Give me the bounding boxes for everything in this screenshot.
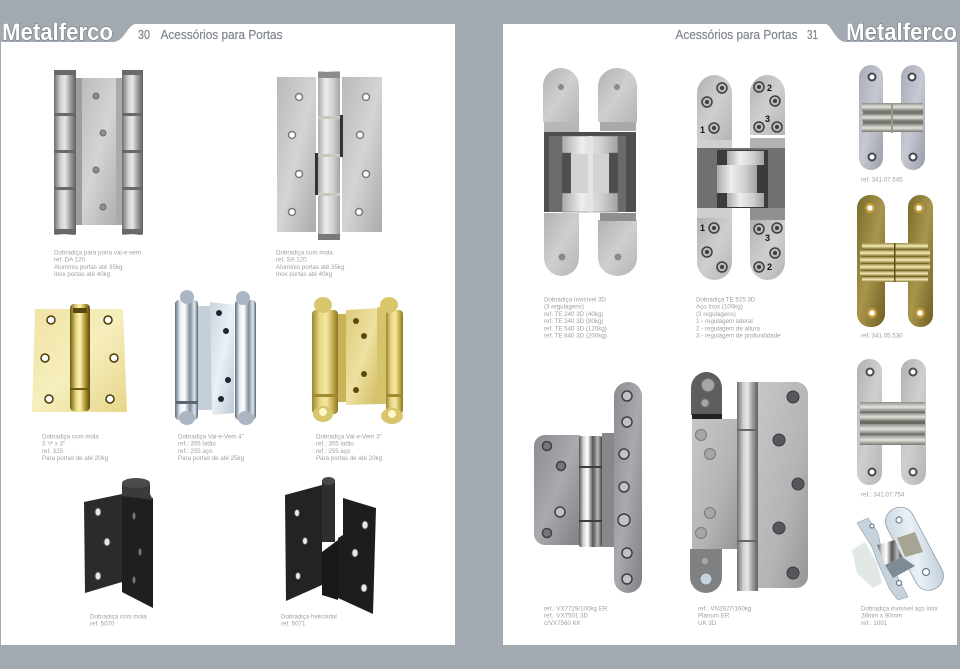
caption: SA 120: ref. SA 120 [276, 257, 307, 264]
icon: hinge VN2927 [690, 372, 808, 593]
caption: 341.07.754: ref.: 341.07.754 [861, 492, 905, 498]
caption: 1001: ref.: 1001 [861, 620, 888, 627]
caption: VN2927: Planum ER [698, 613, 730, 620]
caption: TE 525 3D: 1 - regulagem lateral [696, 318, 753, 325]
icon: brass concealed hinge 341.05.530 [857, 195, 933, 327]
caption: 355/255 3 inch: Dobradiça Vai-e-Vem 3" [316, 434, 382, 440]
icon: hinge DA 120 [54, 70, 143, 235]
caption: 5070: Dobradiça com mola [90, 614, 147, 620]
caption: 341.05.530: ref. 341.05.530 [861, 332, 903, 340]
icon: chrome double action hinge 4 inch [175, 290, 256, 425]
caption: VX7729: ref.: VX7729/100kg ER [544, 606, 608, 612]
caption: 355/255 4 inch: Para portas de até 25kg [178, 455, 245, 462]
labels: adjustment numbers: 3 [765, 114, 770, 124]
caption: 1001: Dobradiça invisível aço inox [861, 606, 939, 612]
caption: TE 240 3D: ref. TE 340 3D (80kg) [544, 318, 603, 325]
labels: adjustment numbers: 1 [700, 125, 705, 135]
icon: brass double action hinge 3 inch [312, 297, 403, 424]
icon: hinge SA 120 [277, 71, 382, 240]
icon: black spring hinge 5070 [84, 478, 153, 608]
caption: DA 120: ref. DA 120 [54, 257, 86, 264]
caption: DA 120: Dobradiça para porta vai-e-vem [54, 250, 141, 256]
panel: right page [503, 19, 960, 645]
caption: TE 525 3D: Dobradiça TE 525 3D [696, 296, 756, 304]
labels: adjustment numbers: 1 [700, 223, 705, 233]
caption: VX7729: ref.: VX7501 3D [544, 613, 589, 620]
icon: black helical hinge 5071 [285, 477, 376, 614]
heading: page 31: Acessórios para Portas [676, 28, 798, 42]
labels: adjustment numbers: 2 [767, 83, 772, 93]
caption: TE 525 3D: Aço Inox (100kg) [696, 304, 743, 311]
caption: DA 120: Alumínio portas até 35kg [54, 264, 123, 271]
icon: hinge VX7729 [534, 382, 642, 593]
caption: SA 120: Dobradiça com mola [276, 250, 333, 256]
caption: TE 525 3D: 2 - regulagem de altura [696, 325, 761, 332]
caption: VX7729: c/VX7560 KK [544, 620, 582, 627]
caption: TE 240 3D: ref. TE 540 3D (120kg) [544, 325, 607, 332]
caption: 5071: Dobradiça helicoidal [281, 614, 337, 620]
labels: adjustment numbers: 3 [765, 233, 770, 243]
caption: 355/255 3 inch: Para portas de até 20kg [316, 455, 383, 462]
caption: TE 240 3D: ref. TE 240 3D (40kg) [544, 311, 603, 318]
header: right logo tab [822, 19, 960, 645]
caption: TE 525 3D: (3 regulagens) [696, 311, 736, 318]
labels: adjustment numbers [700, 83, 772, 272]
caption: 341.07.545: ref. 341.07.545 [861, 176, 903, 184]
icon: concealed hinge 341.07.545 [859, 65, 925, 170]
caption: 5070: ref. 5070 [90, 621, 115, 628]
icon: concealed hinge 341.07.754 [857, 359, 926, 485]
caption: TE 525 3D: 3 - regulagem de profundidade [696, 332, 781, 340]
panel: left page [0, 19, 455, 645]
caption: 355/255 4 inch: Dobradiça Vai-e-Vem 4" [178, 434, 244, 440]
heading: page 31: 31 [807, 28, 818, 42]
icon: invisible stainless hinge 1001 [852, 502, 948, 600]
caption: 355/255 3 inch: ref.: 255 aço [316, 448, 351, 455]
caption: TE 240 3D: ref. TE 640 3D (200kg) [544, 332, 607, 340]
caption: 325: ref. 325 [42, 448, 64, 455]
caption: VN2927: UK 3D [698, 620, 717, 627]
caption: TE 240 3D: Dobradiça Invisível 3D [544, 296, 606, 304]
caption: 325: Dobradiça com mola [42, 434, 99, 440]
caption: 355/255 3 inch: ref.: 355 latão [316, 441, 354, 448]
caption: 355/255 4 inch: ref.: 355 latão [178, 441, 216, 448]
labels: adjustment numbers: 2 [767, 262, 772, 272]
caption: 5071: ref. 5071 [281, 621, 306, 628]
caption: 325: 3 ¹/² x 3" [42, 441, 65, 448]
caption: SA 120: Alumínio portas até 35kg [276, 264, 345, 271]
header: left logo tab: Metalferco [2, 19, 113, 46]
caption: 1001: 28mm x 90mm [861, 613, 902, 620]
icon: invisible hinge TE 240 3D [543, 68, 637, 276]
heading: page 30: 30 [138, 28, 150, 42]
caption: DA 120: Inox portas até 40kg [54, 271, 111, 278]
icon: hinge TE 525 3D [697, 75, 785, 280]
caption: TE 240 3D: (3 regulagens) [544, 304, 584, 311]
icon: brass spring hinge 325 [32, 304, 127, 412]
caption: SA 120: Inox portas até 40kg [276, 271, 333, 278]
heading: page 30: Acessórios para Portas [160, 28, 282, 42]
caption: VN2927: ref.: VN2927/160kg [698, 606, 752, 612]
caption: 355/255 4 inch: ref.: 255 aço [178, 448, 213, 455]
caption: 325: Para portas de até 20kg [42, 455, 109, 462]
